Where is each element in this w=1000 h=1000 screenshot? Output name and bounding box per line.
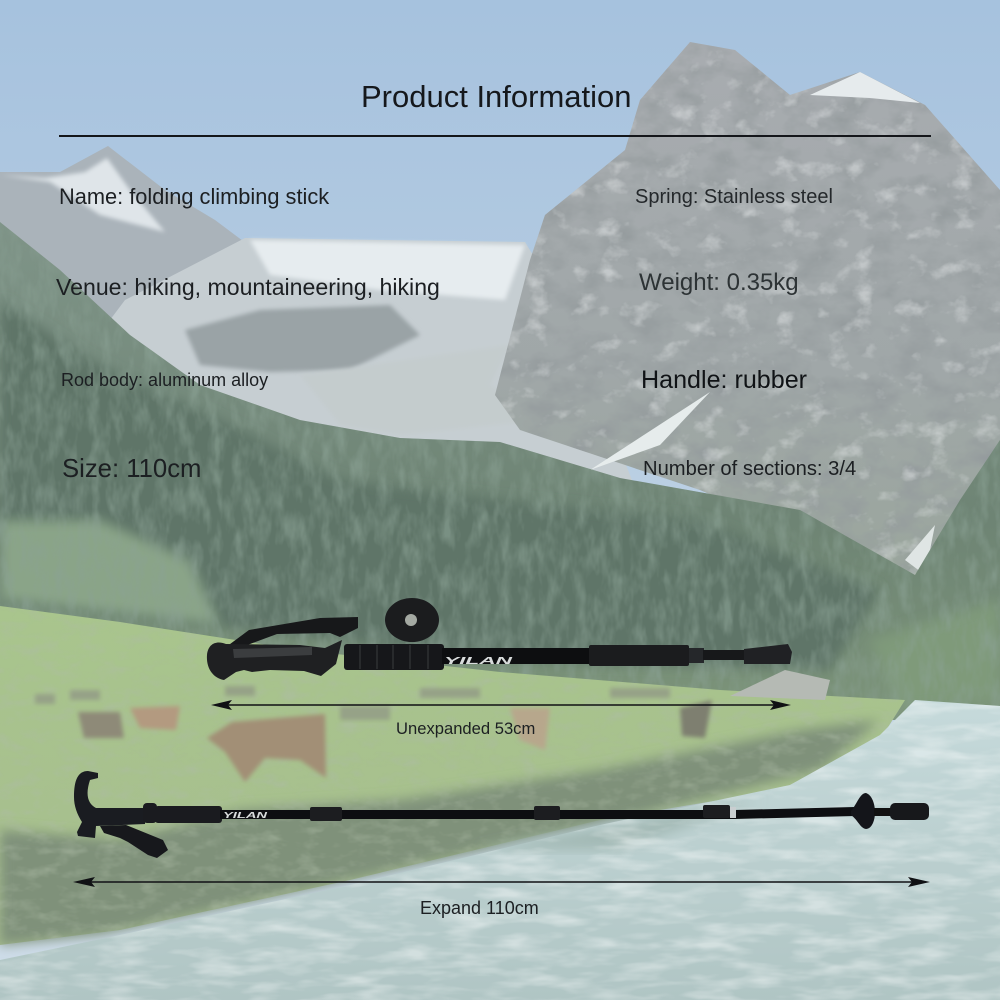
grip bbox=[207, 640, 342, 680]
spec: venue: Venue: hiking, mountaineering, hiking bbox=[56, 274, 440, 300]
expanded pole bbox=[74, 771, 929, 858]
wrist strap loop bbox=[100, 825, 168, 858]
spec: rod body: Rod body: aluminum alloy bbox=[61, 370, 268, 390]
river bbox=[0, 700, 1000, 1000]
rubber tip bbox=[874, 808, 892, 816]
label: unexpanded length: Unexpanded 53cm bbox=[396, 719, 535, 738]
glacier bbox=[110, 238, 640, 500]
brand mark: YILAN bbox=[223, 811, 267, 820]
forest bbox=[0, 222, 1000, 720]
cows bbox=[78, 700, 712, 782]
arrow: expanded length bbox=[73, 877, 930, 887]
spec: weight: Weight: 0.35kg bbox=[639, 269, 799, 296]
arrow: unexpanded length bbox=[211, 700, 791, 710]
shaft bbox=[220, 807, 855, 819]
brand mark: YILAN bbox=[444, 656, 514, 667]
label: expanded length: Expand 110cm bbox=[420, 898, 539, 918]
title divider bbox=[59, 135, 931, 137]
shaft bbox=[442, 648, 592, 664]
section joints bbox=[310, 807, 342, 821]
spec: handle: Handle: rubber bbox=[641, 366, 807, 394]
spec: size: Size: 110cm bbox=[62, 455, 201, 483]
icon: wrist strap bbox=[222, 617, 358, 650]
left mountain bbox=[0, 146, 255, 340]
meadow bbox=[0, 606, 905, 945]
grip and foam bbox=[143, 803, 222, 823]
spec: name: Name: folding climbing stick bbox=[59, 184, 329, 209]
foam sleeve bbox=[344, 644, 444, 670]
icon: basket disc bbox=[385, 598, 439, 642]
title: Product Information bbox=[361, 79, 632, 114]
folded pole bbox=[207, 598, 792, 680]
spec: spring: Spring: Stainless steel bbox=[635, 186, 833, 208]
tip bbox=[744, 644, 792, 664]
right mountain bbox=[495, 42, 1000, 585]
lower sections bbox=[589, 645, 689, 666]
spec: number of sections: Number of sections: 3/4 bbox=[643, 458, 856, 480]
basket bbox=[851, 793, 875, 829]
T-handle bbox=[74, 771, 145, 838]
